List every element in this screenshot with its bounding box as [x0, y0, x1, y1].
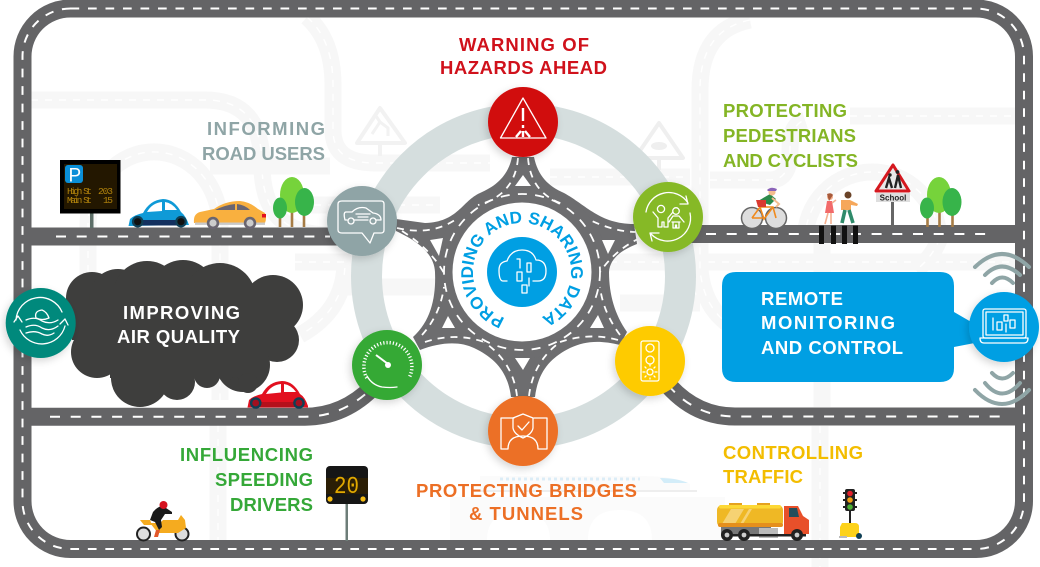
heading: protecting pedestrians and cyclists: PEDESTRIANS — [723, 125, 856, 146]
upper right road — [690, 225, 1015, 243]
heading: protecting pedestrians and cyclists: AND CYCLISTS — [723, 150, 858, 171]
lower left road — [31, 385, 375, 417]
heading: informing road users: ROAD USERS — [202, 143, 325, 164]
panel: air quality cloud — [66, 260, 303, 407]
school warning sign — [876, 165, 910, 228]
trees right — [920, 177, 962, 227]
parking information sign: Main St — [67, 195, 92, 206]
heading: improving air quality: IMPROVING — [123, 302, 240, 323]
parking information sign — [60, 160, 120, 228]
heading: warning of hazards: WARNING OF — [459, 34, 589, 55]
speed indicator sign — [326, 466, 368, 541]
orange car — [194, 201, 266, 229]
portable traffic light — [839, 489, 862, 539]
heading: protecting pedestrians and cyclists: PROTECTING — [723, 100, 847, 121]
icon: speedometer — [352, 330, 422, 400]
panel: remote monitoring callout — [722, 272, 985, 382]
parking information sign: High St — [67, 186, 92, 197]
heading: remote monitoring: MONITORING — [761, 312, 895, 333]
icon: laptop data — [969, 292, 1039, 362]
upper left road — [31, 228, 340, 246]
heading: warning of hazards: HAZARDS AHEAD — [440, 57, 607, 78]
icon: wireless signal waves — [975, 254, 1029, 404]
heading: controlling traffic: CONTROLLING — [723, 442, 863, 463]
faint bridge and train — [450, 476, 725, 540]
heading: influencing speeding drivers: INFLUENCING — [180, 444, 313, 465]
pedestrians — [825, 192, 858, 224]
heading: remote monitoring: REMOTE — [761, 288, 843, 309]
parking information sign: 15 — [103, 195, 113, 206]
blue car — [128, 199, 189, 228]
zebra crossing — [819, 226, 858, 244]
icon: speech bubble car — [327, 186, 397, 256]
speed indicator sign: 20 — [334, 474, 359, 501]
trees left — [273, 177, 314, 227]
lower right road — [660, 375, 1015, 416]
heading: influencing speeding drivers: DRIVERS — [230, 494, 313, 515]
parking information sign: 203 — [98, 186, 113, 197]
icon: pedestrians with arrows — [633, 182, 703, 252]
central roundabout — [396, 157, 640, 397]
heading: improving air quality: AIR QUALITY — [117, 326, 241, 347]
tanker truck — [717, 503, 809, 541]
icon: protected bridge — [488, 396, 558, 466]
icon: cloud data — [487, 237, 557, 307]
centre curved heading: PROVIDING AND SHARING DATA — [461, 212, 583, 328]
heading: remote monitoring: AND CONTROL — [761, 337, 903, 358]
motorcycle — [137, 501, 188, 540]
faint warning sign: sheep — [635, 123, 683, 170]
school warning sign: School — [880, 194, 906, 202]
heading: influencing speeding drivers: SPEEDING — [215, 469, 313, 490]
cyclist — [742, 188, 786, 228]
heading: protecting bridges and tunnels: & TUNNELS — [469, 503, 583, 524]
parking information sign: P — [68, 166, 81, 186]
icon: traffic light — [615, 326, 685, 396]
red car — [248, 381, 308, 409]
heading: informing road users: INFORMING — [207, 118, 325, 139]
icon: warning triangle — [488, 87, 558, 157]
icon: air quality leaf — [6, 288, 76, 358]
heading: protecting bridges and tunnels: PROTECTING BRIDGES — [416, 480, 637, 501]
pale data ring — [366, 119, 680, 433]
faint warning sign: deer — [357, 108, 405, 156]
heading: controlling traffic: TRAFFIC — [723, 466, 803, 487]
